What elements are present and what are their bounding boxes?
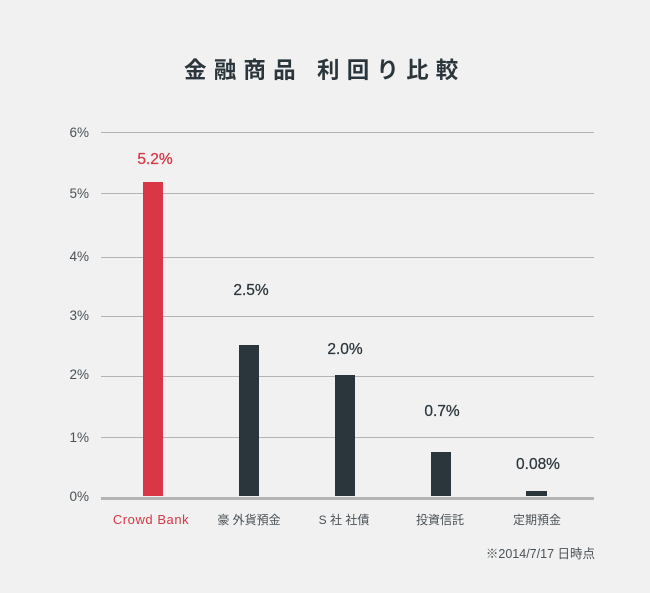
bar: Crowd Bank 5.2% bbox=[143, 182, 163, 496]
category labels: 豪 外貨預金 bbox=[217, 512, 281, 527]
bar: 定期預金 0.08% bbox=[526, 491, 547, 496]
y axis labels: 1% bbox=[69, 430, 89, 445]
bar: 投資信託 0.7% bbox=[431, 452, 451, 496]
value labels: 0.08% bbox=[516, 456, 560, 473]
bar: 豪外貨預金 2.5% bbox=[239, 345, 259, 496]
category labels bbox=[113, 512, 561, 527]
title: second part: 利回り比較 bbox=[317, 58, 466, 83]
category labels: Crowd Bank bbox=[113, 512, 189, 527]
title: 金融商品 bbox=[184, 58, 303, 83]
value labels: 2.0% bbox=[327, 341, 363, 358]
y axis labels: 6% bbox=[69, 125, 89, 140]
category labels: 定期預金 bbox=[513, 513, 561, 527]
y axis labels bbox=[69, 125, 89, 504]
y axis labels: 4% bbox=[69, 249, 89, 264]
category labels: S 社 社債 bbox=[319, 512, 369, 527]
footnote: ※2014/7/17 日時点 bbox=[486, 547, 595, 561]
category labels: 投資信託 bbox=[416, 512, 464, 527]
y axis labels: 0% bbox=[69, 489, 89, 504]
value labels: 5.2% bbox=[137, 151, 173, 168]
y axis labels: 2% bbox=[69, 367, 89, 382]
bar: S社社債 2.0% bbox=[335, 375, 355, 496]
x axis line bbox=[101, 497, 594, 500]
y axis labels: 5% bbox=[69, 186, 89, 201]
value labels bbox=[137, 151, 560, 473]
value labels: 2.5% bbox=[233, 282, 269, 299]
y axis labels: 3% bbox=[69, 308, 89, 323]
value labels: 0.7% bbox=[424, 403, 460, 420]
